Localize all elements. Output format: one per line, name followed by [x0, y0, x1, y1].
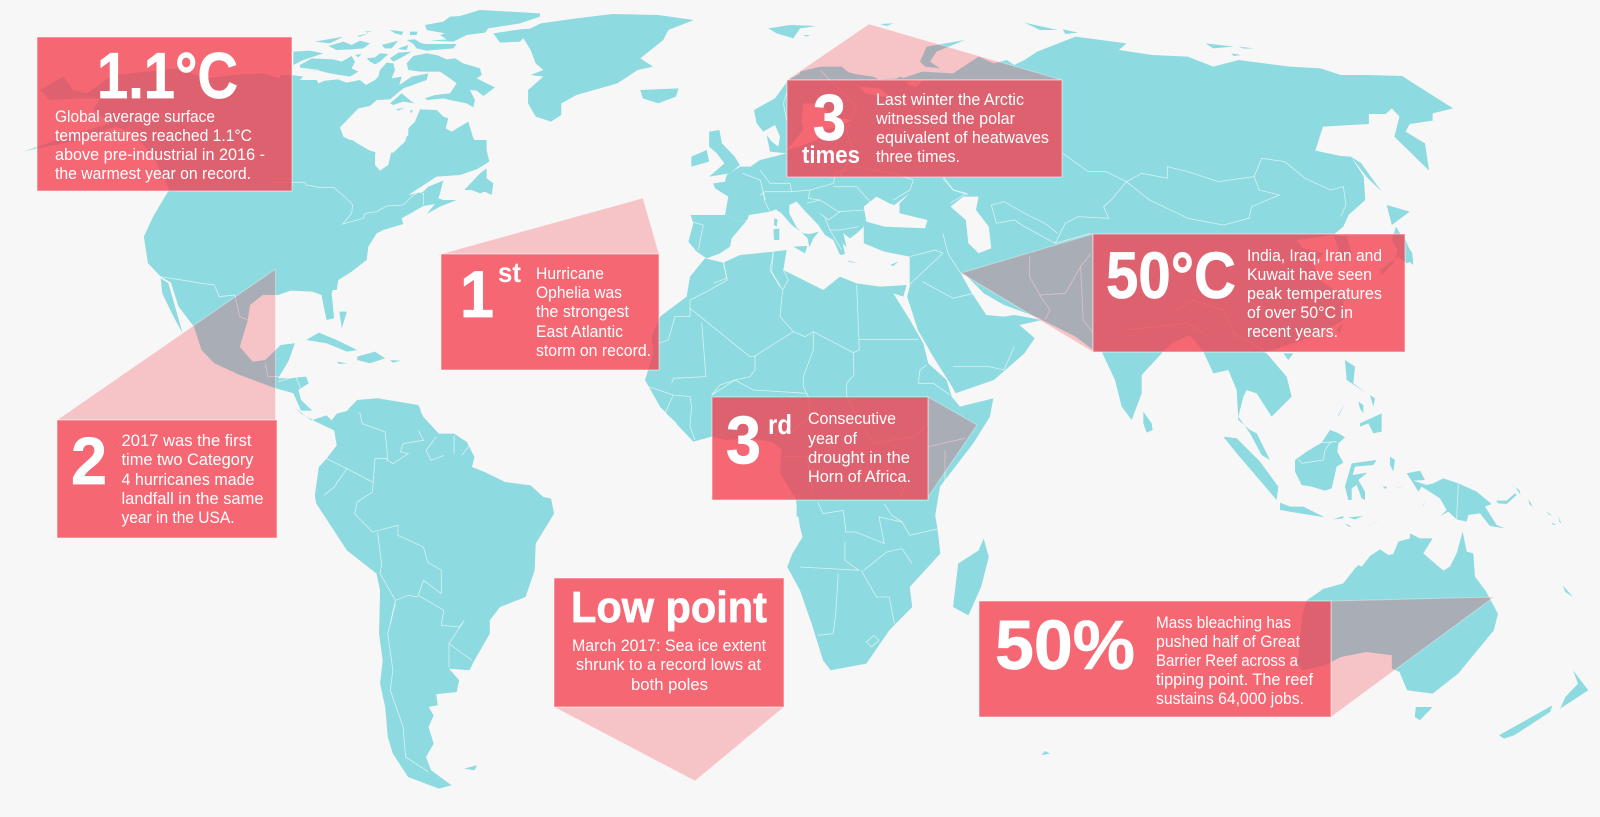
- ordinal suffix: rd: [768, 409, 792, 440]
- description: [1247, 247, 1382, 341]
- panel: Low point sea ice: [554, 578, 784, 781]
- description: both poles: [631, 676, 708, 694]
- pointer triangle: [961, 234, 1093, 352]
- African borders north: [648, 252, 965, 497]
- Asian borders: [907, 153, 1346, 370]
- Alaska and western Canada: [23, 68, 297, 203]
- panel background: [441, 254, 659, 370]
- inland seas Black, Caspian, Persian Gulf: [864, 193, 1042, 320]
- panel: 2 Category 4 hurricanes: [57, 269, 277, 538]
- panel: 1st Hurricane Ophelia: [441, 198, 659, 370]
- Canada and US border: [270, 182, 423, 224]
- panel: 50% Great Barrier Reef: [979, 597, 1494, 717]
- Northern European borders: [783, 70, 967, 203]
- description: Consecutive: [808, 410, 896, 428]
- description: [536, 265, 651, 360]
- unit label: times: [802, 142, 860, 169]
- description: drought in the: [808, 449, 910, 467]
- headline: Low point: [571, 583, 767, 632]
- description: witnessed the polar: [875, 110, 1015, 128]
- description: the strongest: [536, 303, 629, 321]
- big number: 1: [460, 257, 494, 331]
- description: equivalent of heatwaves: [876, 129, 1049, 147]
- description: three times.: [876, 148, 960, 166]
- description: [572, 637, 766, 694]
- panel: 1.1°C global temperature: [37, 37, 292, 191]
- panel background: [979, 601, 1331, 717]
- panel background: [57, 420, 277, 538]
- inland seas Baltic and White: [787, 80, 923, 150]
- description: [875, 91, 1049, 166]
- big number: 1.1°C: [97, 39, 238, 112]
- description: recent years.: [1247, 323, 1338, 341]
- description: 2017 was the first: [122, 432, 252, 450]
- big number: 50%: [995, 606, 1135, 684]
- description: time two Category: [122, 451, 254, 469]
- panel: 50°C peak temperatures: [961, 234, 1405, 352]
- big number: 3: [726, 402, 761, 478]
- description: shrunk to a record lows at: [576, 656, 761, 674]
- description: East Atlantic: [536, 323, 623, 341]
- description: [808, 410, 911, 486]
- description: the warmest year on record.: [55, 165, 251, 183]
- panel background: [1093, 234, 1405, 352]
- northern Europe: [728, 23, 965, 193]
- southern Africa and Australia: [787, 494, 1588, 755]
- description: year of: [808, 430, 857, 448]
- pointer triangle: [928, 397, 977, 497]
- African borders south: [800, 502, 939, 647]
- description: Global average surface: [55, 108, 215, 126]
- Central American borders: [161, 173, 765, 390]
- description: 4 hurricanes made: [122, 471, 254, 489]
- description: sustains 64,000 jobs.: [1156, 690, 1304, 708]
- South American borders: [324, 412, 472, 772]
- panel background: [37, 37, 292, 191]
- panel background: [787, 80, 1062, 177]
- description: Mass bleaching has: [1156, 614, 1291, 632]
- panel: 3rd year of drought: [712, 397, 977, 500]
- description: storm on record.: [536, 342, 651, 360]
- description: pushed half of Great: [1156, 633, 1300, 651]
- Indonesia, New Guinea and northern Australia: [1280, 430, 1562, 593]
- southern Europe and Mediterranean islands: [688, 167, 898, 266]
- description: Last winter the Arctic: [876, 91, 1024, 109]
- eastern Canada and USA: [280, 140, 493, 290]
- description: Hurricane: [536, 265, 604, 283]
- description: March 2017: Sea ice extent: [572, 637, 766, 655]
- pointer triangle: [787, 24, 1062, 80]
- pointer triangle: [57, 269, 276, 420]
- South America: [293, 407, 554, 789]
- North America south, Greenland, Caribbean, Britain, Iberia: [144, 14, 740, 411]
- Africa north: [645, 250, 993, 517]
- description: year in the USA.: [122, 509, 234, 527]
- big number: 50°C: [1106, 238, 1236, 312]
- Southern European borders: [691, 170, 870, 287]
- Lake Michigan and Foxe Basin: [375, 80, 448, 171]
- description: India, Iraq, Iran and: [1247, 247, 1382, 265]
- big number: 2: [71, 424, 107, 499]
- Asia mainland: [800, 23, 1453, 393]
- Canada north and Arctic archipelago: [280, 10, 540, 160]
- India and Southeast Asia: [1093, 233, 1413, 500]
- big number: 3: [813, 81, 846, 154]
- ordinal suffix: st: [498, 257, 521, 288]
- description: Barrier Reef across a: [1156, 652, 1299, 670]
- description: Kuwait have seen: [1247, 266, 1372, 284]
- description: tipping point. The reef: [1156, 671, 1313, 689]
- Hudson Bay south shore: [342, 132, 408, 153]
- description: [122, 432, 264, 527]
- panel background: [712, 397, 928, 500]
- description: [1156, 614, 1313, 708]
- pointer triangle: [1331, 597, 1494, 717]
- pointer triangle: [441, 198, 659, 254]
- description: peak temperatures: [1247, 285, 1382, 303]
- panel: 3 times Arctic heatwaves: [787, 24, 1062, 177]
- pointer triangle: [554, 707, 784, 781]
- panel background: [554, 578, 784, 707]
- description: of over 50°C in: [1247, 304, 1353, 322]
- description: Horn of Africa.: [808, 468, 911, 486]
- description: Ophelia was: [536, 284, 622, 302]
- description: above pre-industrial in 2016 -: [55, 146, 265, 164]
- description: landfall in the same: [122, 490, 264, 508]
- description: temperatures reached 1.1°C: [55, 127, 252, 145]
- description: [55, 108, 265, 183]
- Borneo and New Guinea borders: [1298, 442, 1458, 519]
